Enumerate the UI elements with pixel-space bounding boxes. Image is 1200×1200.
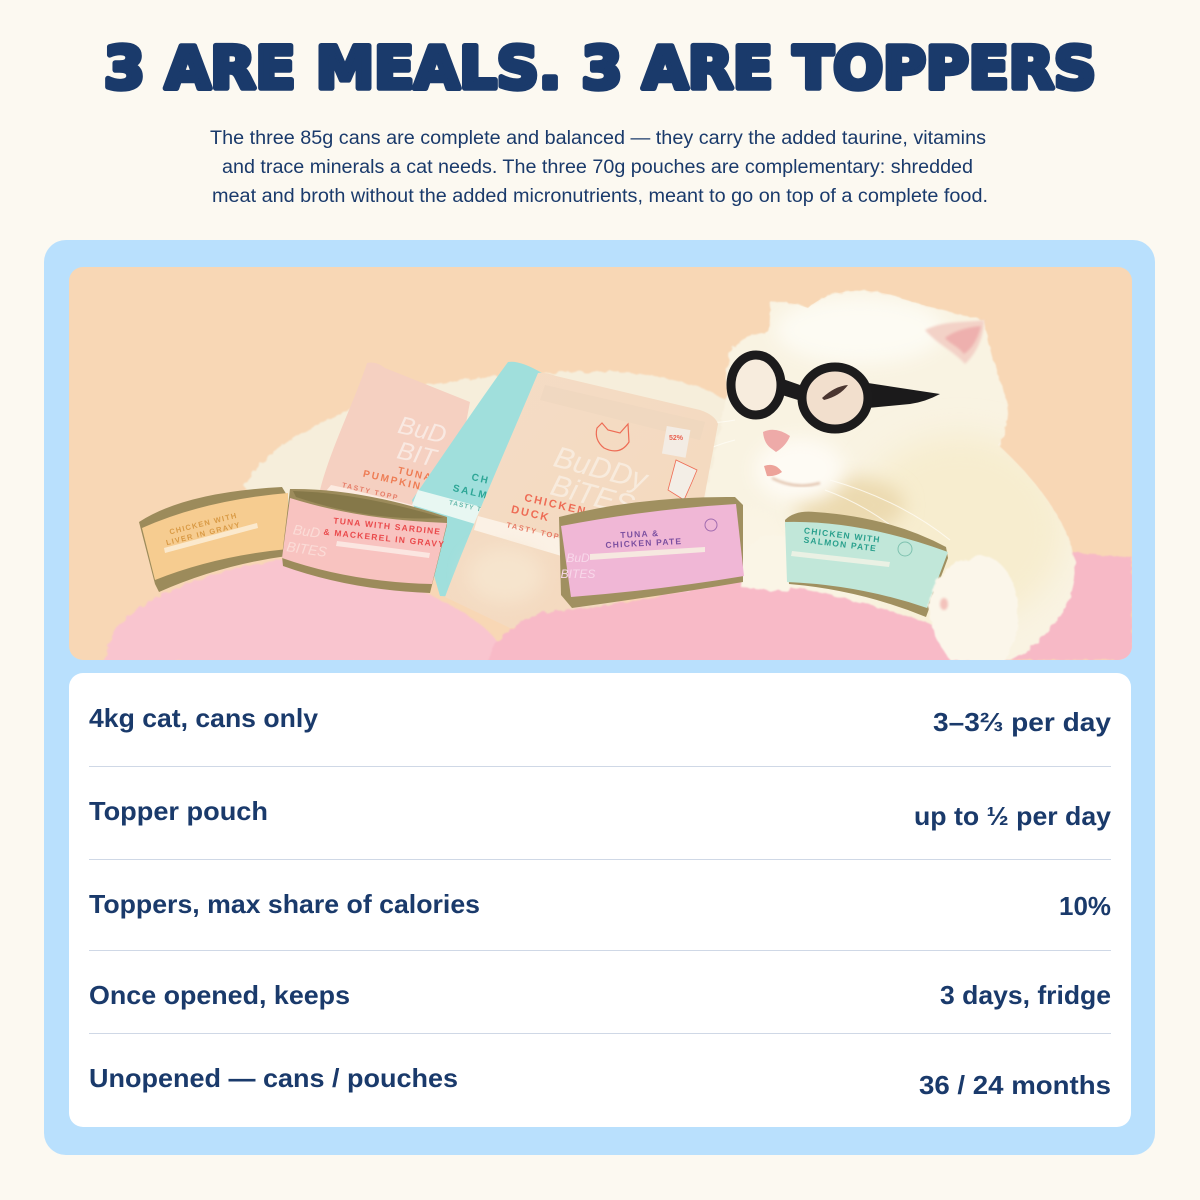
pouch: chicken and duck: [445, 373, 718, 628]
panel: white facts table: [69, 673, 1131, 1127]
far right cushion: [1000, 553, 1132, 660]
pouch: tuna and pumpkin: [320, 362, 470, 505]
cat ear: [925, 320, 984, 364]
photo backdrop: [69, 267, 1132, 660]
pouch: tuna and pumpkin: TASTY TOPP: [341, 482, 399, 502]
pouch: chicken and duck: BiTES: [547, 469, 638, 523]
left cushion: [104, 560, 510, 662]
row: unopened: Unopened — cans / pouches: [89, 1063, 458, 1093]
pouch: tuna and pumpkin: PUMPKIN: [362, 469, 423, 493]
intro paragraph: and trace minerals a cat needs. The three 70g pouches are complementary: shredded: [222, 157, 973, 178]
cat arm: [740, 580, 791, 592]
middle cushion: [489, 582, 958, 660]
pouch 52% badge: 52%: [669, 435, 684, 442]
cat whiskers: [714, 420, 950, 540]
can: tuna and chicken pate: [559, 497, 744, 608]
pouch: chicken and duck: CHICKEN: [523, 492, 588, 518]
pouch: chicken and duck: DUCK: [510, 504, 551, 524]
panel: blue card: [44, 240, 1155, 1155]
row: 4kg cat, cans only: 4kg cat, cans only: [89, 703, 319, 733]
can: tuna with sardine and mackerel: [282, 489, 447, 593]
glasses: [731, 355, 940, 429]
pouch: chicken and salmon: SALM: [452, 483, 490, 502]
pouch: tuna and pumpkin: BuD: [395, 411, 449, 449]
row: 4kg cat, cans only: 3–3⅔ per day: [933, 707, 1112, 737]
pouch 52% badge: [662, 426, 697, 500]
intro paragraph: [210, 128, 988, 207]
can: chicken with salmon pate: [785, 512, 948, 617]
row: toppers max share: Toppers, max share of calories: [89, 889, 480, 919]
row: topper pouch: [89, 796, 1112, 831]
can: tuna and chicken pate: BuD: [566, 551, 590, 565]
pouch: chicken and salmon: TASTY T: [448, 499, 482, 514]
can: tuna and chicken pate: CHICKEN PATE: [605, 536, 683, 550]
row: once opened: Once opened, keeps: [89, 980, 350, 1010]
cat tongue: [764, 465, 782, 476]
can: chicken with liver: [139, 487, 288, 592]
can: tuna and chicken pate: BITES: [561, 567, 595, 581]
title: 3 ARE MEALS. 3 ARE TOPPERS: [104, 34, 1096, 102]
pouch: chicken and duck: BuDDy: [550, 441, 653, 498]
pouch: tuna and pumpkin: TUNA: [397, 465, 434, 484]
cat body and head: [660, 291, 1075, 660]
pouch cat logo: [596, 423, 629, 451]
row: toppers max share: 10%: [1059, 891, 1111, 921]
intro paragraph: The three 85g cans are complete and balanced — they carry the added taurine, vitamins: [210, 128, 986, 149]
row: 4kg cat, cans only: [89, 703, 1112, 737]
photo: cat with cans and pouches: [69, 267, 1132, 664]
cat fur shading: [855, 435, 1065, 625]
row: topper pouch: Topper pouch: [89, 796, 268, 826]
row: unopened: [89, 1063, 1111, 1100]
can: tuna with sardine and mackerel: TUNA WITH SARDINE: [333, 515, 442, 537]
row dividers: [89, 766, 1111, 1034]
can: tuna with sardine and mackerel: & MACKEREL IN GRAVY: [323, 527, 446, 549]
can: chicken with salmon pate: CHICKEN WITH: [803, 525, 881, 545]
can: tuna with sardine and mackerel: BITES: [286, 538, 328, 560]
pouch: chicken and salmon: [412, 362, 542, 600]
pouch: chicken and salmon: CH: [470, 472, 491, 487]
row: unopened: 36 / 24 months: [919, 1070, 1111, 1100]
can: chicken with liver: CHICKEN WITH: [168, 511, 238, 536]
intro paragraph: meat and broth without the added micronutrients, meant to go on top of a complete food.: [212, 186, 988, 207]
can: tuna with sardine and mackerel: BuD: [292, 521, 321, 541]
pouch: tuna and pumpkin: BIT: [395, 437, 440, 473]
cat back fur: [243, 370, 726, 505]
row: once opened: [89, 980, 1111, 1010]
row: once opened: 3 days, fridge: [940, 980, 1111, 1010]
cat paw: [930, 556, 1018, 664]
cat nose: [763, 430, 790, 452]
can: chicken with salmon pate: SALMON PATE: [803, 535, 878, 553]
can: tuna and chicken pate: TUNA &: [620, 528, 660, 540]
pouch: chicken and duck: TASTY TOPP: [506, 520, 567, 543]
row: toppers max share: [89, 889, 1111, 921]
row: topper pouch: up to ½ per day: [914, 801, 1112, 831]
can: chicken with liver: LIVER IN GRAVY: [165, 520, 242, 547]
